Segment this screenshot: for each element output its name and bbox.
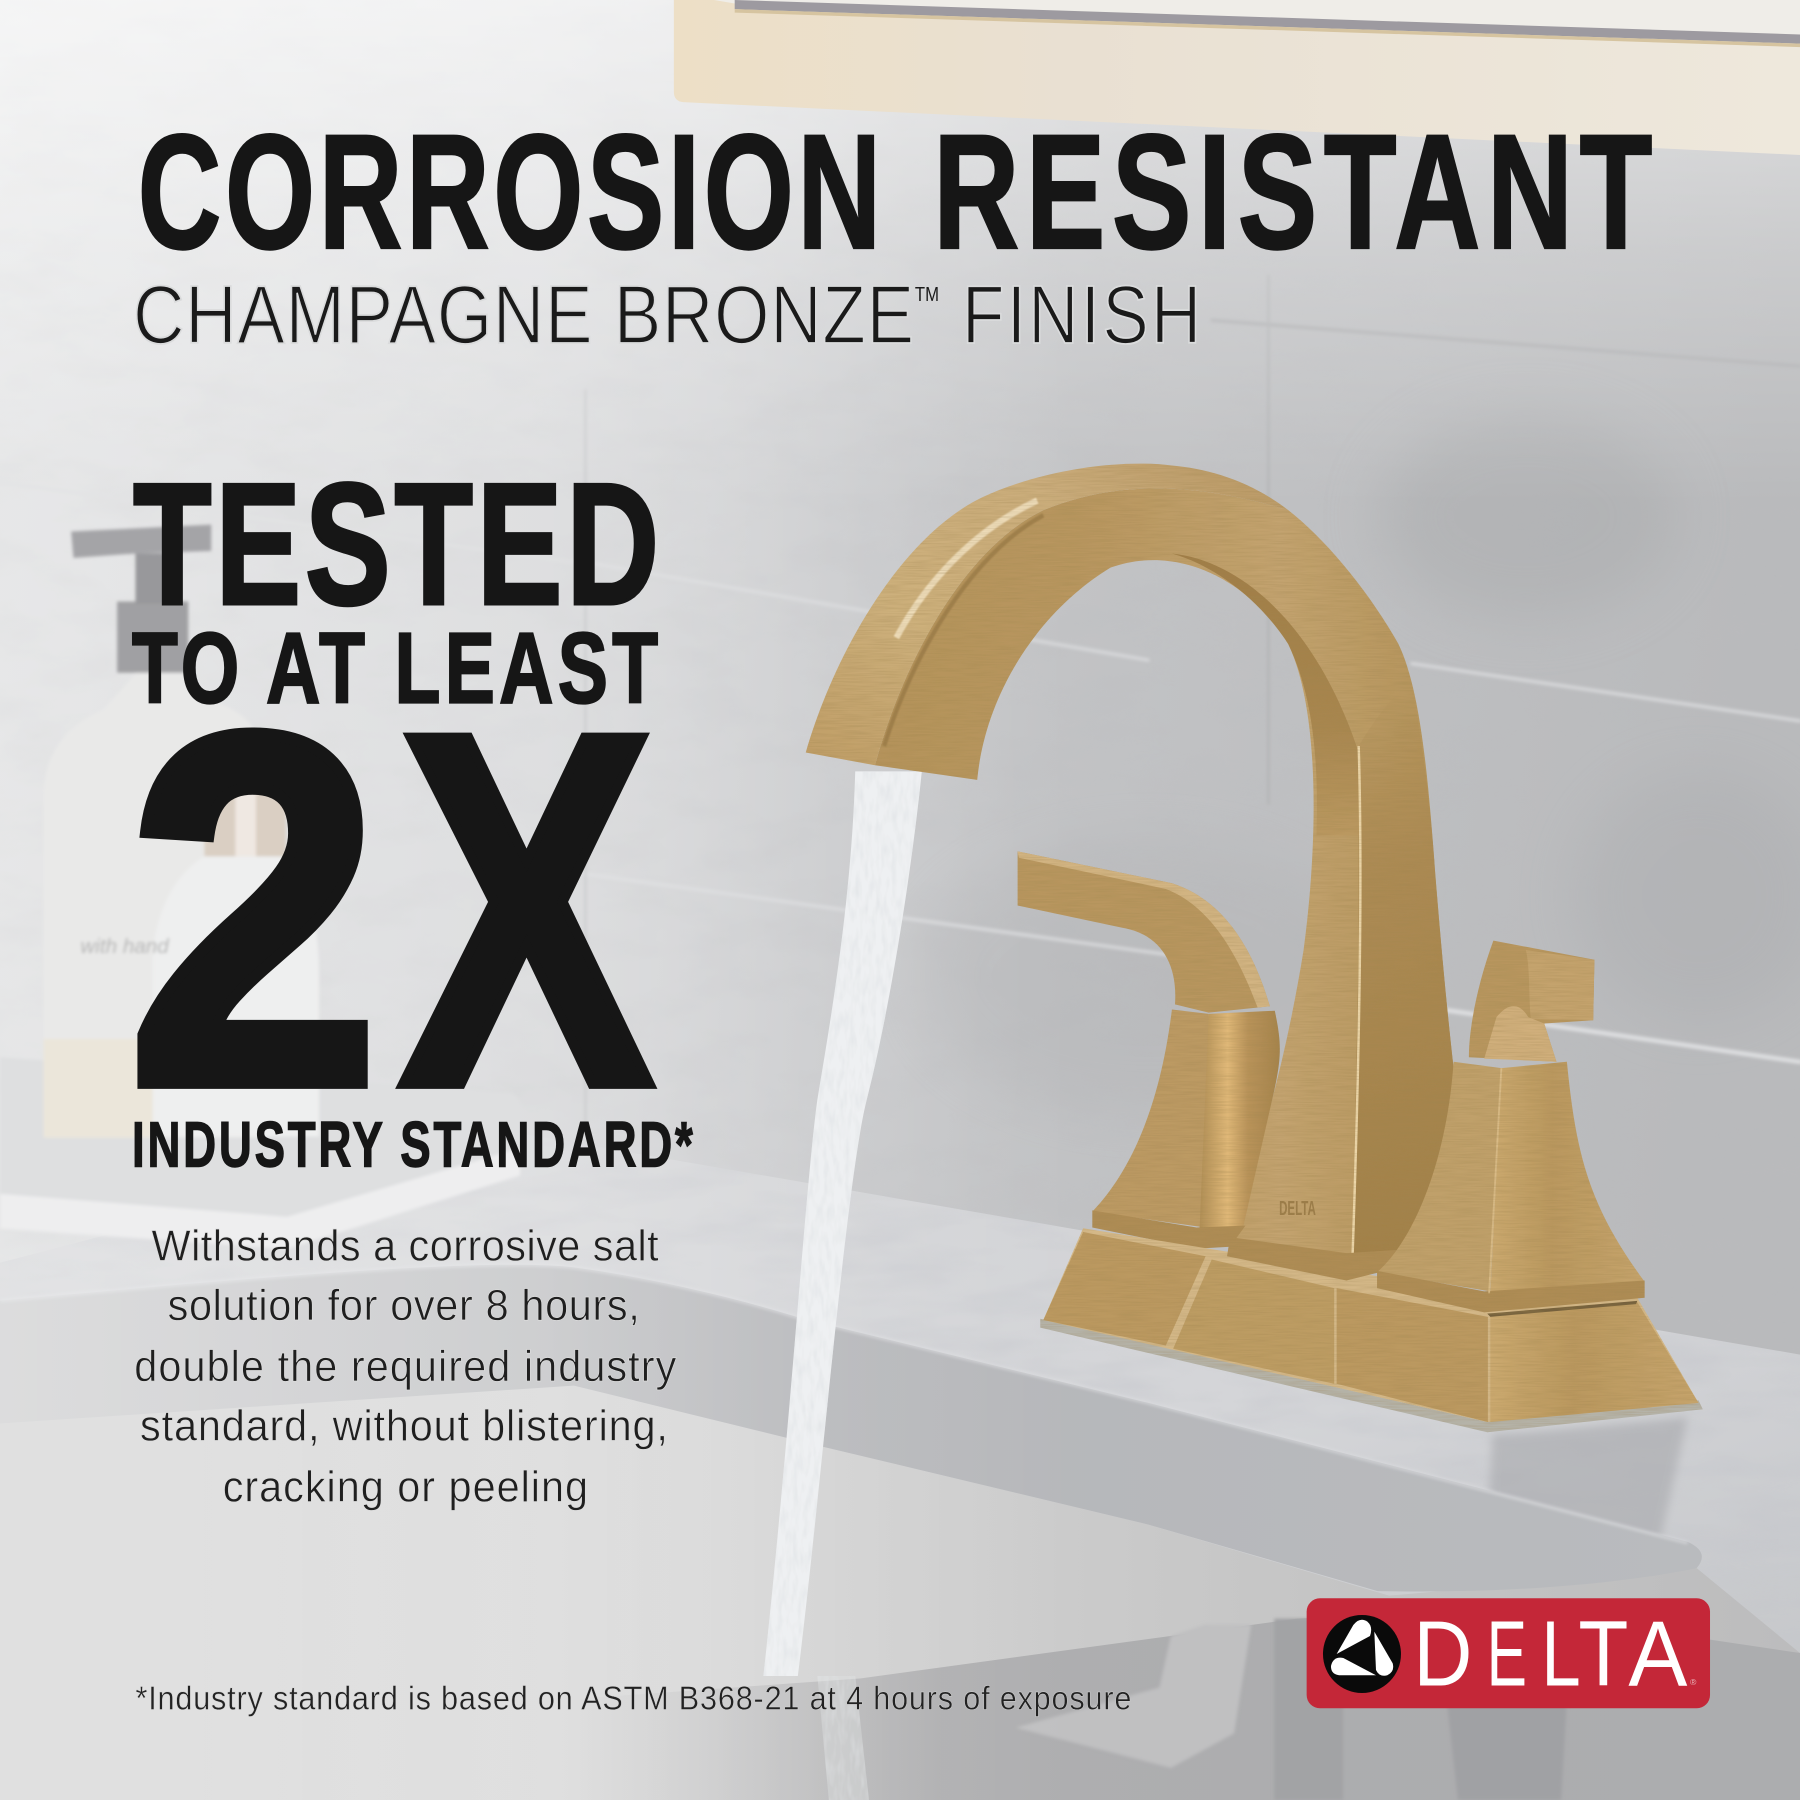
marble counter: [712, 1175, 1800, 1653]
right handle knob: [1469, 941, 1594, 1062]
marble counter front edge: [0, 1265, 1702, 1591]
embossed logo on faucet: DELTA: [1279, 1197, 1316, 1220]
cabinet above the wall: [674, 0, 1800, 155]
right valve cap: [1377, 1062, 1645, 1317]
subtitle: CHAMPAGNE BRONZE: [133, 269, 914, 361]
logo wordmark: A: [1628, 1602, 1687, 1706]
left valve cap: [1092, 1009, 1280, 1249]
logo wordmark: [1413, 1602, 1687, 1706]
logo wordmark: E: [1487, 1602, 1527, 1706]
2x figure: 2: [127, 632, 380, 1189]
title: RESISTANT: [933, 102, 1652, 283]
tested: TESTED: [133, 448, 659, 641]
delta logo: [1307, 1598, 1710, 1708]
title: CORROSION: [138, 100, 881, 283]
title: [138, 100, 1652, 283]
body text: Withstands a corrosive salt: [152, 1221, 659, 1271]
sink basin: [0, 1386, 1800, 1800]
center body flange: [1227, 1237, 1398, 1280]
logo wordmark: T: [1578, 1602, 1628, 1706]
to at least: TO AT LEAST: [132, 612, 658, 724]
footnote: *Industry standard is based on ASTM B368-21 at 4 hours of exposure: [135, 1679, 1131, 1717]
faucet: [806, 464, 1703, 1432]
faded soap bottles and tray: with hand: [80, 935, 170, 958]
body text: cracking or peeling: [223, 1463, 588, 1512]
water stream: [763, 771, 922, 1800]
left handle lever: [1018, 851, 1270, 1013]
industry standard: INDUSTRY STANDARD*: [132, 1109, 693, 1180]
registered mark: ®: [1690, 1677, 1697, 1687]
logo mark: [1323, 1615, 1401, 1693]
logo wordmark: D: [1413, 1602, 1472, 1706]
2x figure: X: [401, 630, 654, 1189]
body text: double the required industry: [134, 1342, 677, 1391]
body text: standard, without blistering,: [140, 1402, 668, 1451]
subtitle: FINISH: [962, 270, 1201, 362]
body text: [134, 1221, 677, 1512]
headline: tested to at least 2x industry standard: [127, 448, 693, 1189]
logo wordmark: L: [1541, 1602, 1581, 1706]
faucet spout and body: [806, 464, 1454, 1282]
faded soap bottles and tray: [0, 525, 520, 1249]
base plate: [1040, 1228, 1703, 1432]
body text: solution for over 8 hours,: [168, 1281, 640, 1330]
subtitle: TM: [915, 283, 939, 306]
2x figure: [127, 630, 654, 1189]
